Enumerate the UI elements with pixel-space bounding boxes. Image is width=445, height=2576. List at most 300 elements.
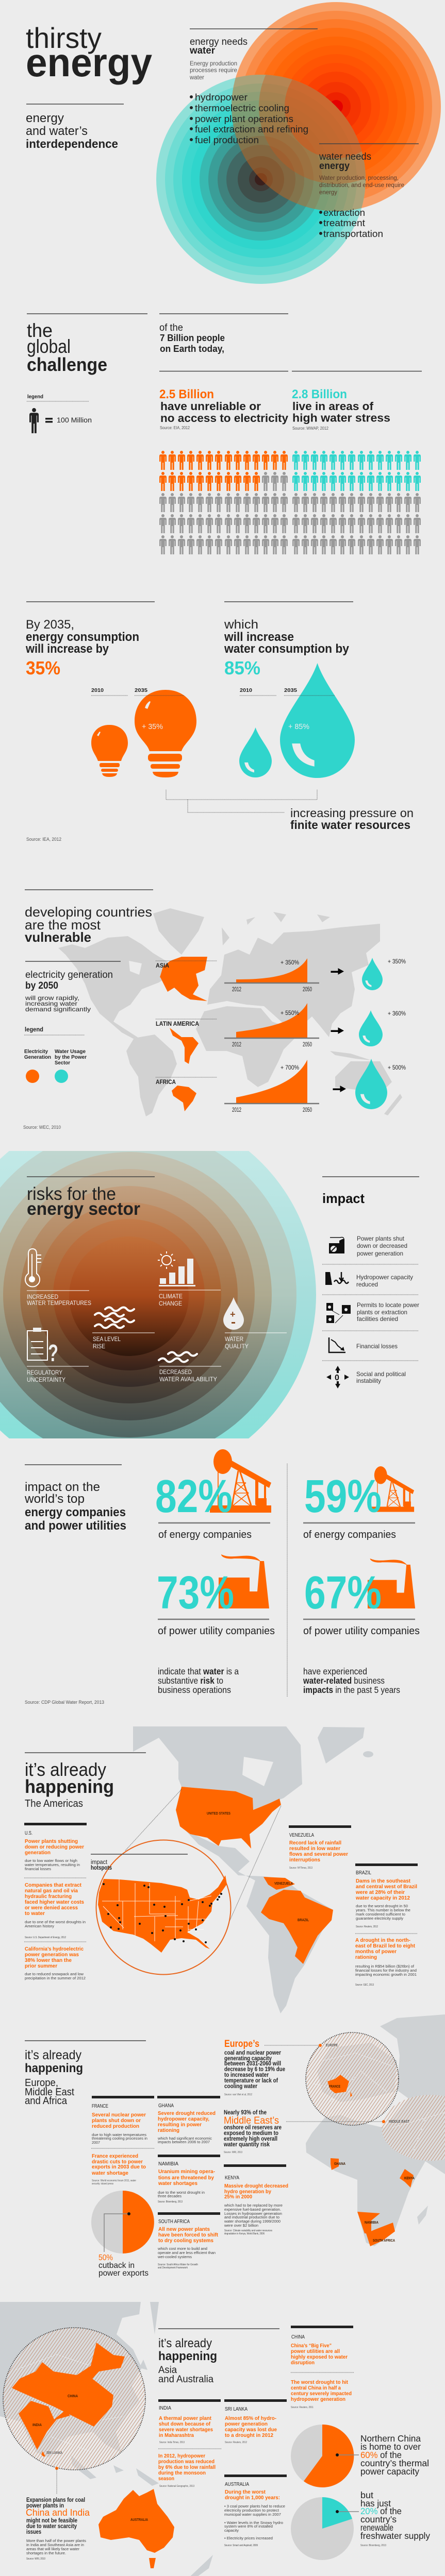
text column: Sri Lanka: Almost 85% of hydro- [225, 2415, 276, 2421]
text: water needs energy: Water production, processing, [319, 175, 399, 181]
text: expansion plans: shortages in the future. [26, 2551, 66, 2555]
text: energy needs water: processes require [190, 67, 237, 74]
text: substantive risk: business operations [158, 1685, 231, 1695]
text: Middle East reserves: Nearly 93% of the [224, 2110, 267, 2116]
text column: China: power utilities are all [291, 2348, 340, 2354]
text column: China: The worst drought to hit [291, 2379, 348, 2385]
risk: water quality: QUALITY [225, 1344, 249, 1350]
text column: U.S.: down or reducing power [25, 1844, 84, 1850]
text column: India: Source: National Geographic, 2013 [159, 2485, 194, 2488]
text column: Australia: drought in 1,000 years: [225, 2495, 280, 2501]
legend: impact hotspots [91, 1854, 188, 1871]
map: Australia [98, 2489, 174, 2568]
map: highlighted African countries: GHANA [334, 2161, 345, 2166]
legend: Generation [24, 1054, 51, 1060]
impact: power plants: power generation [357, 1250, 403, 1257]
heading: happening [158, 2349, 217, 2363]
heading: and Australia [158, 2374, 213, 2385]
text column: Sri Lanka: SRI LANKA [225, 2406, 248, 2412]
text column: U.S.: financial losses [25, 1867, 51, 1871]
text: expansion plans: China and India [26, 2507, 90, 2518]
text: water-related impacts: water-related business [303, 1675, 385, 1686]
text column: China: central China in half a [291, 2385, 341, 2391]
risk: increased water temperatures: INCREASED [27, 1294, 58, 1300]
heading: it’s already [25, 2048, 81, 2062]
text column: Venezuela: flows and several power [289, 1851, 348, 1857]
text: substantive risk: indicate that water is a [158, 1666, 239, 1676]
chart: overlapping energy and water circles [156, 2, 441, 284]
text column: South Africa: and Development Framework [158, 2266, 188, 2269]
text column: Ghana: GHANA [158, 2103, 174, 2109]
risk: decreased water availability: DECREASED [159, 1369, 192, 1376]
icon: large water drop: + 85% [288, 722, 309, 731]
text column: Brazil: guarantee electricity supply [356, 1916, 403, 1921]
text column: U.S.: generation [25, 1850, 51, 1856]
text: has just 20 percent [360, 2490, 430, 2547]
text: Europe's generating capacity: Europe’s [224, 2039, 259, 2049]
chart: 60 percent thermal capacity pie [291, 2425, 359, 2487]
text: expansion plans: power plants in [26, 2503, 64, 2509]
legend: impact hotspots: impact [91, 1859, 108, 1866]
source: Source: WEC, 2010 [23, 1125, 61, 1130]
map: Brazil and Venezuela: VENEZUELA [274, 1881, 293, 1886]
text column: U.S.: faced higher water costs [25, 1899, 84, 1905]
text column: India: during the monsoon [158, 2470, 206, 2476]
callout: pressure on water [290, 806, 414, 832]
list: water needs energy: extraction [323, 207, 365, 218]
text column: U.S.: American history [25, 1924, 54, 1928]
stat: electricity: have unreliable or [160, 400, 261, 413]
text column: India [158, 2399, 221, 2488]
list: energy needs water: thermoelectric cooling [195, 103, 289, 113]
text: electricity generation: demand significantly [25, 1006, 91, 1013]
text: expansion plans: Expansion plans for coal [26, 2497, 85, 2503]
text column: Kenya: which had to be replaced by more [224, 2203, 283, 2208]
row: Asia: 2012 [232, 987, 241, 993]
stat: 82 percent [155, 1449, 271, 1540]
text column: South Africa [157, 2212, 220, 2269]
text: expansion plans: Source: WRI, 2010 [26, 2557, 45, 2561]
text column: Brazil: years. This number is below the [356, 1908, 410, 1912]
text: Middle East reserves: onshore oil reserves are [224, 2125, 282, 2131]
text column: Australia: municipal water supplies in 2007 [224, 2512, 281, 2517]
row: Latin America: 2012 [232, 1042, 241, 1048]
text column: France: water shortage [91, 2170, 128, 2176]
map: highlighted African countries [331, 2158, 415, 2246]
text column: India: in Maharashtra [159, 2432, 194, 2438]
text column: France: security: island press [92, 2182, 113, 2185]
text column: Venezuela: VENEZUELA [289, 1832, 314, 1838]
text: has just 20 percent: renewable [360, 2522, 393, 2533]
text: Middle East reserves: Middle East’s [224, 2115, 279, 2126]
text column: Ghana: impacts between 2006 to 2007 [158, 2140, 210, 2144]
risk: sea level rise: RISE [93, 1344, 105, 1350]
text: substantive risk: substantive risk to [158, 1675, 223, 1686]
text: Northern China: is home to over [360, 2442, 421, 2452]
text column: India: In 2012, hydropower [158, 2453, 205, 2459]
text: expansion plans [26, 2497, 90, 2561]
heading [158, 2336, 217, 2385]
row: Asia: ASIA [156, 962, 169, 969]
risk: water quality: + [230, 1309, 236, 1319]
impact: instability [326, 1366, 406, 1388]
row: Africa: + 700% [281, 1065, 299, 1071]
text: Europe's generating capacity: Source: van Vliet et al, 2012 [224, 2093, 252, 2096]
list: energy needs water [190, 92, 308, 145]
text: expansion plans: areas that will likely face water [26, 2547, 79, 2551]
map: United States mini: UNITED STATES [207, 1811, 230, 1816]
hotspot: China and India circle: SRI LANKA [46, 2450, 62, 2455]
stat: water [292, 387, 390, 431]
text: energy consumption: will increase by [25, 642, 109, 656]
text column: Australia: • Water levels in the Snowy hydro [224, 2520, 283, 2525]
text column: China: hydropower generation [291, 2396, 345, 2402]
text column: Brazil: east of Brazil led to eight [355, 1943, 415, 1949]
text column: Sri Lanka: Source: Reuters, 2012 [225, 2441, 247, 2444]
legend: 100 Million [57, 416, 92, 424]
text: Northern China: power capacity [360, 2466, 419, 2477]
text: energy needs water: water [189, 45, 216, 56]
heading: it’s already [158, 2336, 212, 2350]
list: water needs energy: transportation [323, 228, 383, 239]
text column: Ghana: resulting in power [158, 2122, 202, 2128]
text column: Sri Lanka: capacity was lost due [225, 2427, 277, 2433]
legend: Electricity [24, 1048, 48, 1055]
text column: Kenya: 25% in 2000 [224, 2194, 252, 2200]
hotspot: China and India circle [3, 2328, 145, 2470]
text: has just 20 percent: 20% of the [360, 2506, 402, 2516]
map: Americas [133, 1726, 373, 2013]
text column: Kenya: Massive drought decreased [224, 2183, 288, 2189]
stat: 67 percent: 67% [304, 1567, 382, 1619]
text column: U.S.: or were denied access [25, 1905, 78, 1911]
text: water needs energy: distribution, and end-use require [319, 182, 404, 189]
text: has just 20 percent: but [360, 2490, 373, 2500]
text column: Brazil: rationing [355, 1954, 377, 1960]
risk: water quality [223, 1297, 287, 1350]
map: Europe, Middle East and Africa [306, 2014, 445, 2246]
heading: and Africa [25, 2095, 68, 2107]
impact: financial losses: Financial losses [356, 1343, 398, 1350]
stat: water: 2.8 Billion [292, 387, 347, 401]
text column: Kenya: degradation in Kenya, World Bank, 2006 [224, 2232, 265, 2235]
text column: Brazil: months of power [355, 1948, 397, 1955]
map: highlighted African countries: SOUTH AFRICA [373, 2238, 395, 2243]
text: Northern China: Northern China [360, 2433, 421, 2444]
text: has just 20 percent: country’s [360, 2514, 397, 2524]
hotspot: Middle East region [382, 2095, 445, 2161]
text column: Namibia: due to the worst drought in [158, 2190, 205, 2195]
text column: U.S.: U.S. [25, 1830, 32, 1836]
text: electricity generation: by 2050 [25, 980, 58, 991]
heading: global [27, 336, 71, 357]
text column: Brazil: BRAZIL [356, 1870, 371, 1876]
text column: Kenya: and industrial production due to [224, 2215, 279, 2219]
text: Europe's generating capacity: between 2031-2060 will [224, 2061, 281, 2067]
panel: impact on companies [24, 1449, 420, 1705]
heading: risks for the [27, 1184, 116, 1204]
text: of the 7 billion: on Earth today, [160, 344, 224, 354]
stat: electricity: 2.5 Billion [159, 387, 214, 401]
impact: hydropower: reduced [356, 1281, 378, 1288]
text column: South Africa: SOUTH AFRICA [158, 2218, 190, 2225]
callout: pressure on water: increasing pressure on [290, 806, 414, 820]
chart: 20 percent freshwater pie [291, 2497, 359, 2560]
heading: The Americas [25, 1798, 83, 1809]
text: water needs energy: energy [319, 190, 337, 196]
heading: vulnerable [25, 929, 91, 945]
text: Europe's generating capacity: cooling water [224, 2083, 257, 2090]
row: Asia: + 350% [281, 960, 299, 966]
text column: India: shut down because of [159, 2421, 210, 2427]
text column: France: reduced production [92, 2123, 139, 2129]
text column: U.S.: precipitation in the summer of 2012 [25, 1976, 86, 1980]
list: water needs energy [319, 207, 383, 239]
impact: power plants: Power plants shut [357, 1235, 405, 1242]
text: expansion plans: due to water scarcity [26, 2523, 77, 2530]
text column: Australia: • Electricity prices increased [224, 2536, 273, 2540]
text column: Venezuela: interruptions [289, 1857, 320, 1863]
text column: China: highly exposed to water [291, 2354, 348, 2360]
chart: France 50 percent pie [91, 2191, 154, 2278]
panel: developing countries [23, 890, 406, 1130]
stat: water: high water stress [292, 411, 390, 425]
impact: power plants: down or decreased [357, 1242, 407, 1249]
text column: China: Source: Reuters, 2011 [291, 2406, 314, 2409]
text: of the 7 billion: of the [159, 323, 183, 333]
text column: Kenya: Losses in hydropower generation [224, 2211, 282, 2216]
heading: Asia [158, 2365, 177, 2376]
text: water-related impacts: impacts in the past 5 years [303, 1685, 400, 1695]
text column: France: due to high water temperatures [92, 2132, 146, 2137]
text: expansion plans: might not be feasible [26, 2518, 77, 2524]
panel: it's already happening, Europe, Middle East and Africa [25, 2014, 445, 2278]
text: water consumption: water consumption by [224, 642, 350, 656]
impact: instability: 0 [335, 1374, 339, 1382]
text: water consumption [224, 618, 350, 679]
chart labels: years: 2010 [240, 688, 252, 693]
text column: France: exports in 2003 due to [92, 2164, 146, 2170]
risk: regulatory uncertainty: REGULATORY [27, 1370, 62, 1376]
heading: impact on the [25, 1480, 100, 1494]
heading: are the most [25, 917, 101, 933]
text column: Australia: capacity [224, 2528, 239, 2533]
risk: regulatory uncertainty: UNCERTAINTY [27, 1377, 65, 1383]
text column: Venezuela [289, 1825, 351, 1870]
legend [24, 1026, 87, 1083]
impact: instability: instability [356, 1377, 381, 1384]
legend: impact hotspots: hotspots [91, 1865, 112, 1871]
legend: legend [25, 1026, 43, 1033]
pictogram: water people [292, 451, 421, 554]
text column: Australia: system were 8% of installed [224, 2524, 273, 2529]
map: Australia: AUSTRALIA [130, 2517, 148, 2522]
panel: it's already happening, Asia and Australia [0, 2302, 430, 2576]
text column: Brazil: Source: GEC, 2013 [355, 1984, 374, 1987]
heading: challenge [27, 354, 107, 375]
text: expansion plans: issues [26, 2529, 41, 2535]
impact: hydropower: Hydropower capacity [356, 1274, 413, 1281]
impact: hydropower [325, 1272, 413, 1288]
text column: China [291, 2326, 354, 2409]
text column: India: INDIA [159, 2405, 171, 2411]
title: energy [26, 40, 152, 85]
map: Brazil and Venezuela: BRAZIL [298, 1918, 309, 1922]
text column: Sri Lanka: to a drought in 2012 [225, 2432, 273, 2438]
list: energy needs water: power plant operations [195, 113, 293, 124]
hotspot: Europe circle: FRANCE [329, 2084, 340, 2089]
text: of the 7 billion: 7 Billion people [160, 333, 225, 343]
risk: decreased water availability: WATER AVAILABILITY [159, 1377, 217, 1383]
map: Asia [0, 2302, 213, 2576]
text column: Ghana [157, 2096, 220, 2144]
heading: developing countries [25, 904, 152, 920]
text: Middle East reserves: water quantity risk [223, 2142, 270, 2148]
impact: permits: plants or extraction [357, 1309, 407, 1316]
text column: U.S.: California’s hydroelectric [25, 1946, 84, 1952]
text column: China: disruption [291, 2360, 315, 2366]
source: Source: IEA, 2012 [26, 837, 61, 842]
risk: increased water temperatures: WATER TEMPERATURES [27, 1300, 91, 1307]
arrow: bracket to pressure statement [166, 790, 317, 812]
impact: permits [326, 1301, 419, 1323]
heading: happening [25, 2061, 83, 2075]
text column: U.S.: to water [25, 1910, 45, 1917]
title: thirsty [26, 22, 102, 54]
title [26, 22, 152, 85]
text column: India: by 6% due to low rainfall [158, 2464, 216, 2470]
text column: South Africa: have been forced to shift [158, 2232, 218, 2238]
text: Europe's generating capacity: generating capacity [224, 2056, 272, 2062]
chart labels: years [91, 688, 335, 696]
text column: Namibia: NAMIBIA [158, 2161, 178, 2167]
text column: Kenya [224, 2164, 288, 2235]
risk: increased water temperatures [25, 1249, 91, 1307]
list: energy needs water: fuel production [195, 134, 259, 145]
map: Brazil and Venezuela [261, 1877, 333, 1964]
row: Africa: 2050 [303, 1107, 312, 1113]
text: of the 7 billion [159, 323, 225, 354]
heading [24, 1480, 126, 1533]
risk: sea level rise [92, 1308, 155, 1350]
text: energy consumption: energy consumption [26, 630, 139, 644]
text: Middle East reserves: extremely high overall [224, 2136, 277, 2142]
subtitle: energy [26, 111, 64, 125]
text: electricity generation: increasing water [25, 1000, 77, 1007]
text column: India: severe water shortages [159, 2427, 213, 2433]
text column: Brazil: financial losses for the industry and [355, 1968, 417, 1973]
text column: Brazil: due to the worst drought in 50 [356, 1904, 408, 1908]
text column: U.S.: hydraulic fracturing [25, 1893, 72, 1900]
text: water-related impacts [303, 1666, 400, 1695]
text: Middle East reserves: Source: WRI, 2013 [224, 2151, 242, 2154]
text column: Ghana: Severe drought reduced [158, 2110, 216, 2116]
heading: world’s top [24, 1492, 85, 1506]
text column: France: Several nuclear power [92, 2112, 146, 2118]
stat: 59 percent [303, 1466, 415, 1540]
heading: the [27, 320, 53, 341]
text column: Australia: • 3 coal power plants had to reduce [224, 2504, 285, 2509]
text: water needs energy: energy [319, 161, 350, 172]
text column: Ghana: rationing [158, 2127, 179, 2133]
text column: Kenya: Source: Climate variability and water resources [224, 2229, 272, 2232]
impact: financial losses [329, 1337, 398, 1352]
risk: water quality: WATER [225, 1336, 243, 1343]
text column: Namibia: Source: Bloomberg, 2013 [158, 2200, 183, 2204]
text column: South Africa: to dry cooling systems [158, 2238, 213, 2244]
row: Latin America: LATIN AMERICA [156, 1020, 199, 1027]
text column: South Africa: wet-cooled systems [157, 2255, 192, 2259]
text column: China: century severely impacted [291, 2391, 352, 2397]
text: energy consumption: 35% [26, 657, 60, 679]
icon: large light bulb [135, 690, 196, 777]
hotspot: Europe circle [306, 2032, 399, 2125]
risk: sea level rise: SEA LEVEL [93, 1336, 121, 1343]
chart: France 50 percent pie: cutback in [98, 2261, 135, 2270]
risk: climate change: CLIMATE [159, 1294, 183, 1300]
subtitle [26, 111, 118, 150]
chart: France 50 percent pie: 50% [98, 2253, 113, 2262]
stat: water: live in areas of [292, 400, 374, 413]
text column: Venezuela: resulted in low water [289, 1845, 340, 1852]
row: Latin America: 2050 [303, 1042, 312, 1048]
legend: Water Usage [55, 1048, 86, 1055]
text column: Sri Lanka [224, 2399, 287, 2444]
subtitle: and water’s [26, 124, 88, 138]
subtitle: interdependence [26, 137, 118, 150]
text column: China: CHINA [291, 2334, 305, 2340]
text column: France: 2007 [92, 2140, 100, 2145]
text column: Kenya: hydro generation by [224, 2189, 271, 2195]
text column: U.S.: due to low water flows or high [25, 1858, 77, 1863]
chart labels: years: 2010 [91, 688, 104, 693]
legend: by the Power [55, 1054, 87, 1060]
text column: U.S.: water temperatures, resulting in [24, 1862, 80, 1867]
text column: Australia: AUSTRALIA [225, 2481, 249, 2487]
text: Middle East reserves [223, 2110, 409, 2154]
impact: instability: Social and political [356, 1370, 406, 1378]
text column: Sri Lanka: power generation [225, 2421, 268, 2427]
heading [25, 904, 152, 945]
list: energy needs water: hydropower [195, 92, 248, 103]
legend [27, 394, 92, 433]
text column: Kenya: water shortage during 1999/2000 [224, 2219, 281, 2224]
heading: and power utilities [25, 1519, 126, 1533]
text column: South Africa: All new power plants [158, 2226, 210, 2232]
text column: India: season [158, 2476, 174, 2482]
callout: impact hotspots map of US [96, 1840, 231, 1974]
text: expansion plans: More than half of the power plants [26, 2538, 86, 2543]
text: water needs energy [319, 151, 404, 196]
text: energy needs water [189, 37, 248, 81]
row: Africa: + 500% [388, 1065, 406, 1071]
row: Asia: + 350% [388, 959, 406, 965]
text column: Australia: electricity production to protect [224, 2508, 279, 2513]
text column: India: production was reduced [158, 2459, 215, 2465]
text column: Brazil: and central west of Brazil [356, 1884, 417, 1890]
text: Europe's generating capacity: EUROPE [326, 2043, 338, 2047]
text column: Namibia: tions are threatened by [158, 2175, 214, 2181]
panel: risks for the energy sector [0, 1151, 419, 1438]
text column: France: Source: World economic forum 2011, water [92, 2179, 136, 2182]
text column: U.S.: power generation was [25, 1952, 79, 1958]
text column: Kenya: expensive fuel-based generation. [224, 2207, 281, 2212]
text column: Australia: Source: Smart and Aspinall, 2009 [224, 2544, 258, 2547]
hotspot: China and India circle: CHINA [68, 2394, 78, 2398]
text column: Brazil: water capacity in 2012 [355, 1895, 410, 1901]
text column: Venezuela: Source: NYTimes, 2013 [289, 1867, 312, 1870]
stat: 67 percent [303, 1558, 420, 1637]
